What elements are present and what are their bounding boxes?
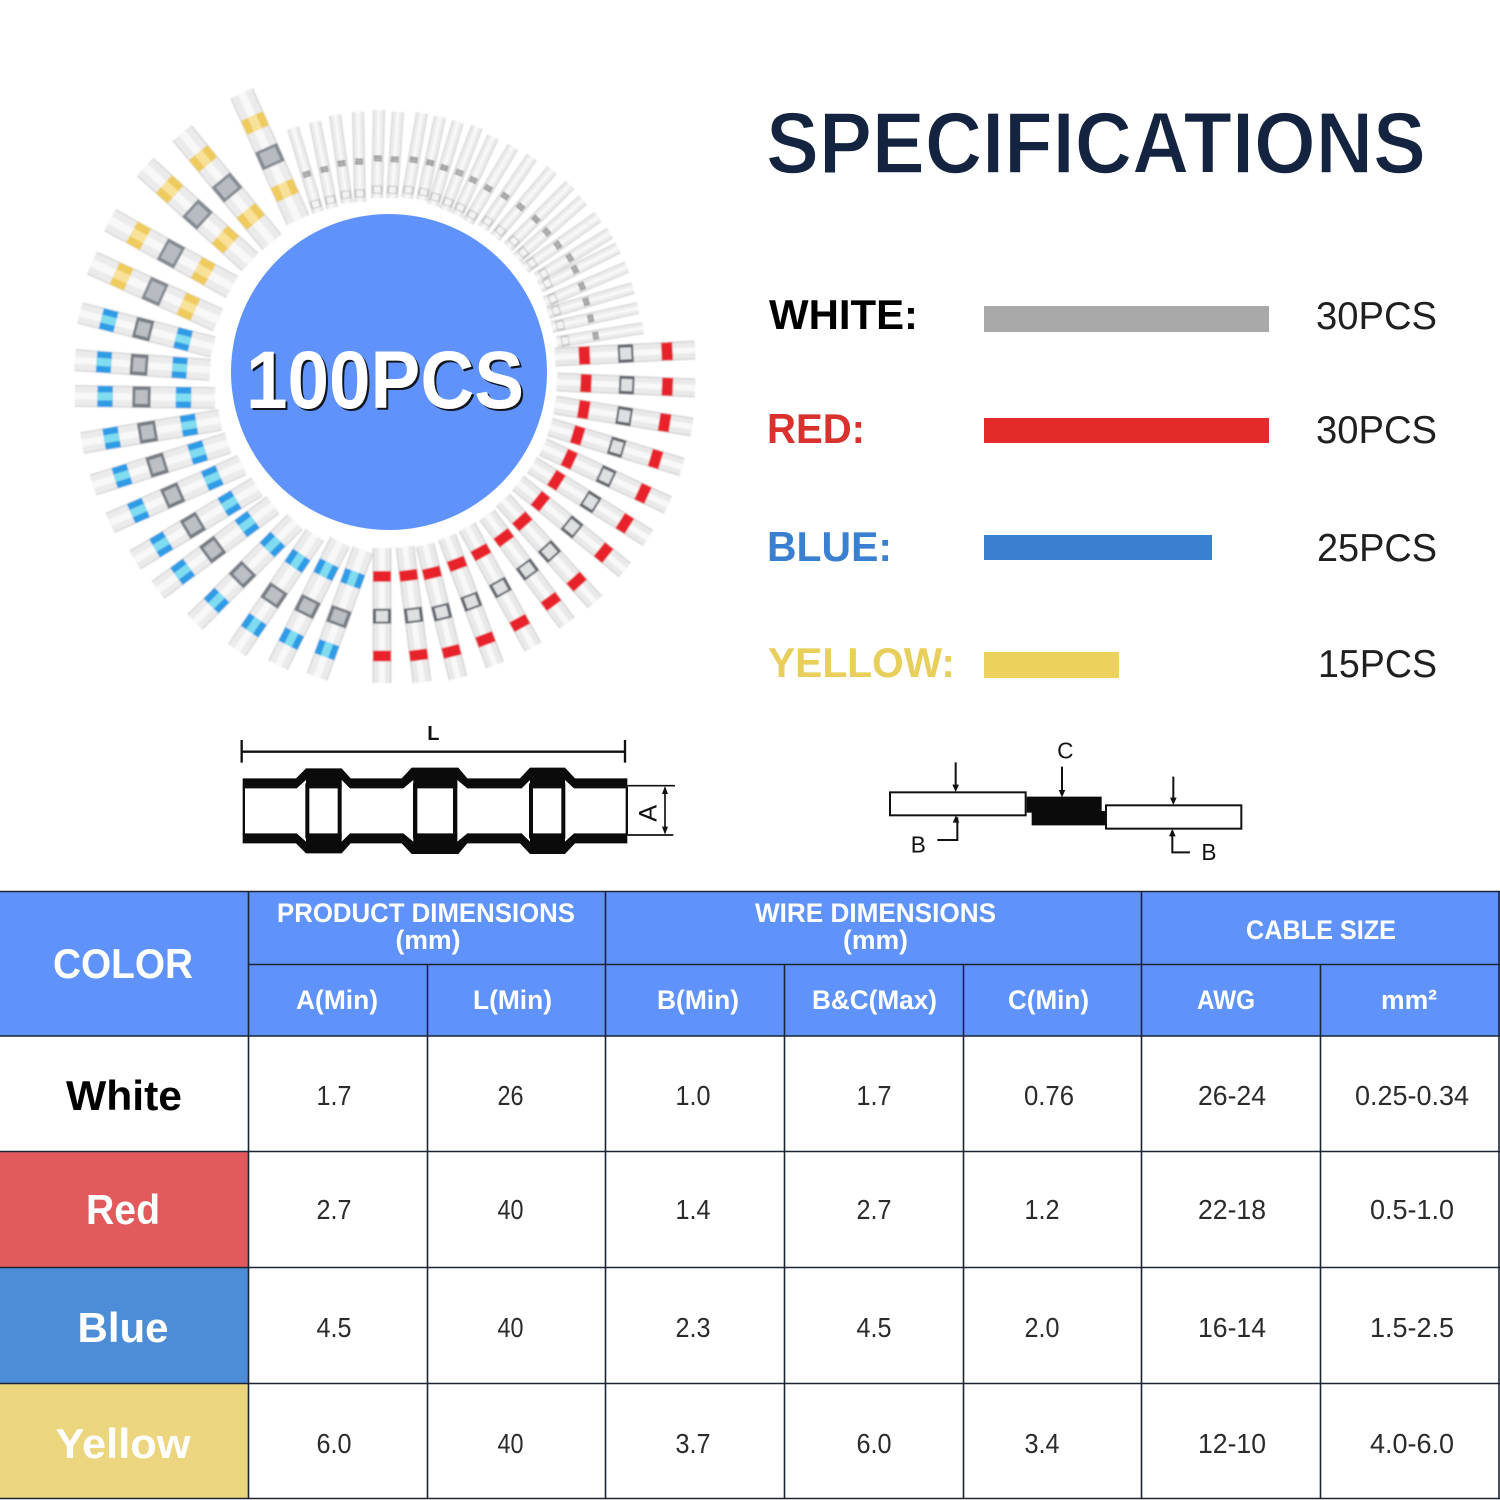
row: yellow: 15PCS	[1318, 643, 1437, 686]
blue centre circle	[231, 214, 547, 530]
100PCS badge text: 100PCS	[246, 335, 524, 426]
title: SPECIFICATIONS	[766, 95, 1426, 192]
row: Blue	[78, 1304, 1454, 1351]
row: white: 30PCS	[1316, 295, 1437, 338]
row: Yellow	[56, 1420, 1454, 1467]
blue connectors	[75, 313, 363, 677]
connector section	[243, 768, 628, 854]
header labels: B&C(Max)	[812, 985, 937, 1015]
colour cell: yellow	[0, 1383, 248, 1498]
diagram: wire dimensions B and C	[890, 737, 1241, 865]
header labels: CABLE SIZE	[1246, 915, 1396, 945]
row: Red: 0.5-1.0	[1370, 1194, 1454, 1225]
header labels: mm²	[1381, 985, 1437, 1015]
row: Red: 40	[498, 1194, 524, 1225]
row: Yellow: 4.0-6.0	[1370, 1428, 1454, 1459]
white connectors	[293, 110, 643, 342]
header labels: COLOR	[53, 940, 193, 987]
row: Blue: 40	[498, 1312, 524, 1343]
diagram: connector dimensions L and A	[242, 723, 675, 854]
colour cell: red	[0, 1151, 248, 1267]
row: White: 26-24	[1198, 1080, 1266, 1111]
row: Yellow: 12-10	[1198, 1428, 1266, 1459]
connector ring illustration	[75, 93, 695, 683]
row: Red: Red	[86, 1186, 160, 1233]
dimension A	[627, 786, 675, 835]
header labels: L(Min)	[473, 985, 552, 1015]
labels	[911, 737, 1217, 865]
row: White: 1.7	[856, 1080, 892, 1111]
dimension L	[242, 723, 625, 763]
specification table	[0, 891, 1500, 1499]
header labels: (mm)	[843, 925, 908, 955]
red connectors	[382, 350, 695, 683]
row: Blue: 1.5-2.5	[1370, 1312, 1454, 1343]
labels: B	[911, 832, 926, 858]
row: Red: 2.7	[856, 1194, 892, 1225]
row: blue	[767, 523, 1437, 570]
row: Yellow: 3.7	[676, 1428, 710, 1459]
row: white	[769, 291, 1437, 338]
labels: C	[1057, 737, 1074, 763]
row: Blue: 2.0	[1024, 1312, 1060, 1343]
row: White: 0.76	[1024, 1080, 1074, 1111]
row: blue: 25PCS	[1317, 527, 1437, 570]
row: red: 30PCS	[1316, 409, 1437, 452]
header labels: WIRE DIMENSIONS	[755, 898, 996, 928]
table grid	[0, 891, 1500, 1499]
header labels: C(Min)	[1008, 985, 1089, 1015]
row: White: White	[66, 1072, 182, 1119]
row: Yellow: 6.0	[856, 1428, 892, 1459]
row: yellow	[768, 639, 1437, 686]
row: Blue: 16-14	[1198, 1312, 1266, 1343]
row: Red: 2.7	[316, 1194, 352, 1225]
row: White	[66, 1072, 1469, 1119]
row: Red: 1.2	[1024, 1194, 1060, 1225]
colour cell: blue	[0, 1267, 248, 1383]
row: Yellow: Yellow	[56, 1420, 191, 1467]
row: red	[767, 405, 1437, 452]
row: Yellow: 40	[498, 1428, 524, 1459]
header labels: B(Min)	[657, 985, 739, 1015]
table header background	[0, 891, 1500, 1036]
row: Yellow: 6.0	[316, 1428, 352, 1459]
row: Blue: 2.3	[676, 1312, 710, 1343]
header labels: PRODUCT DIMENSIONS	[277, 898, 575, 928]
row: Red: 22-18	[1198, 1194, 1266, 1225]
header labels	[53, 898, 1437, 1015]
row: White: 26	[498, 1080, 524, 1111]
row: Red	[86, 1186, 1454, 1233]
100PCS badge text: 100PCS	[248, 337, 526, 428]
row: White: 0.25-0.34	[1355, 1080, 1469, 1111]
row: blue: BLUE:	[767, 523, 892, 570]
row: red: RED:	[767, 405, 865, 452]
header labels: A(Min)	[296, 985, 378, 1015]
quantity chart	[767, 291, 1437, 686]
labels: B	[1201, 839, 1217, 865]
row: Blue: Blue	[78, 1304, 168, 1351]
wires and splice	[890, 792, 1241, 829]
row: white: WHITE:	[769, 291, 918, 338]
dimension A: A	[635, 805, 663, 822]
row: yellow: YELLOW:	[768, 639, 955, 686]
row: Red: 1.4	[676, 1194, 710, 1225]
header labels: (mm)	[396, 925, 460, 955]
row: White: 1.7	[316, 1080, 352, 1111]
row: Blue: 4.5	[856, 1312, 892, 1343]
row: Yellow: 3.4	[1024, 1428, 1060, 1459]
row: Blue: 4.5	[316, 1312, 352, 1343]
dimension L: L	[427, 723, 439, 745]
arrows	[937, 762, 1190, 852]
row: White: 1.0	[676, 1080, 710, 1111]
header labels: AWG	[1197, 985, 1255, 1015]
yellow connectors	[92, 93, 298, 320]
